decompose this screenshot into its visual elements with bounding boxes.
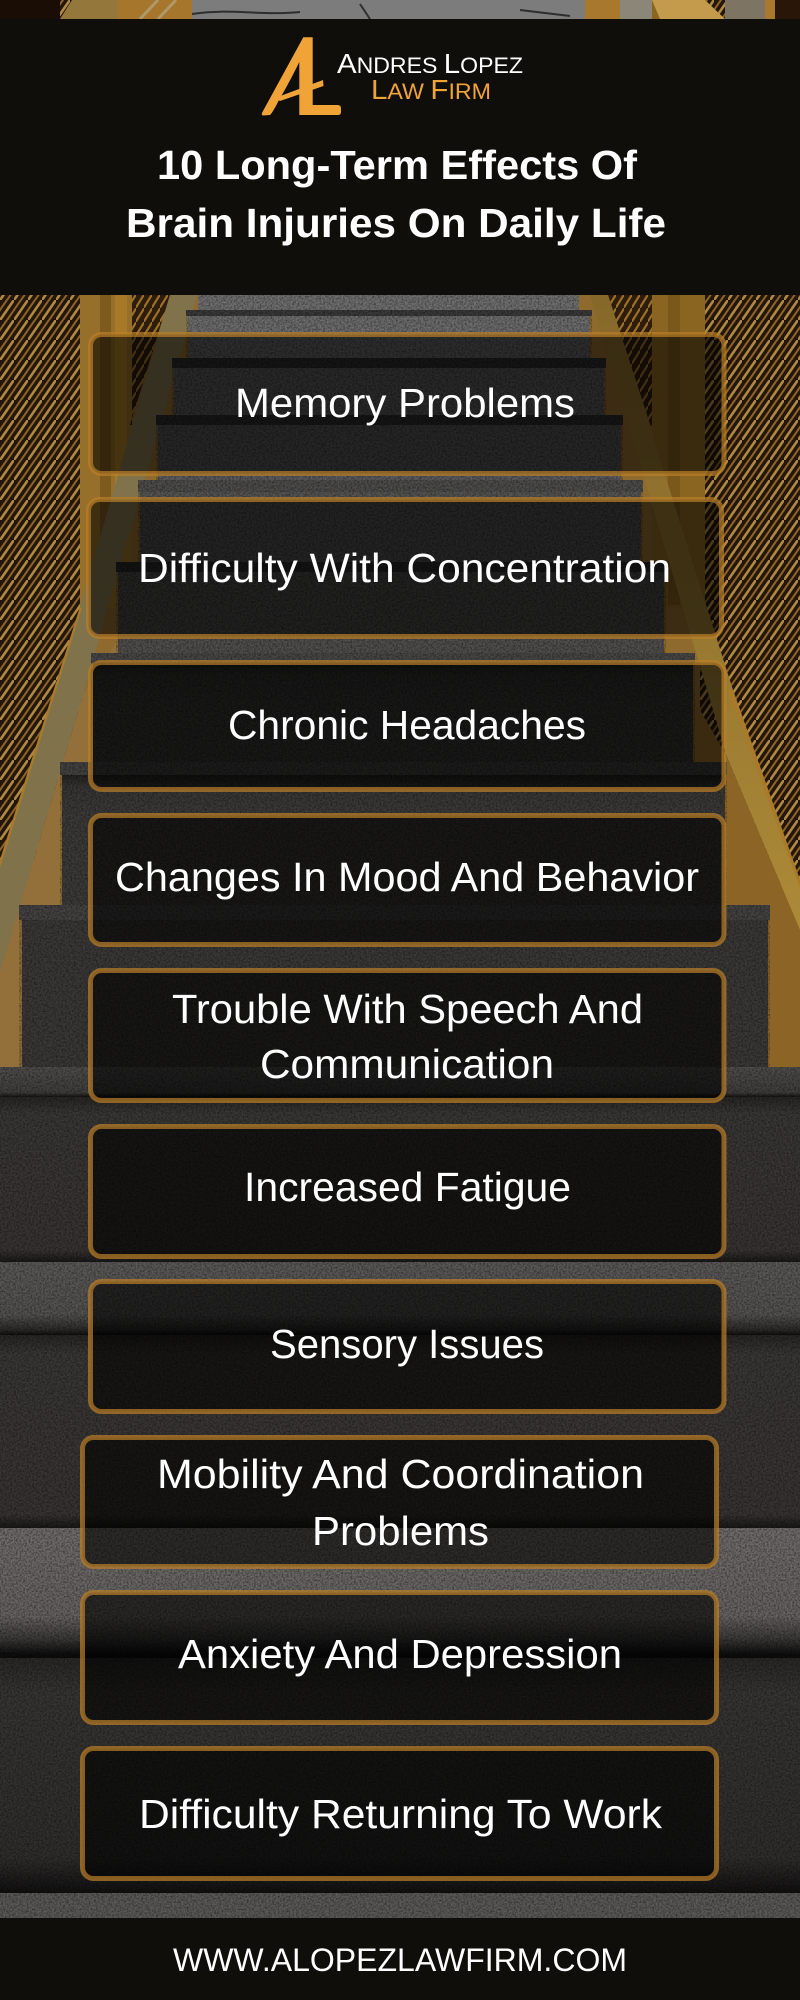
title <box>126 142 666 246</box>
logo mark: AL monogram <box>262 37 341 115</box>
footer website URL: WWW.ALOPEZLAWFIRM.COM <box>173 1942 627 1978</box>
panel: Trouble With Speech And Communication <box>90 970 724 1100</box>
right wire mesh <box>700 0 800 885</box>
panel: Increased Fatigue: Increased Fatigue <box>244 1164 571 1210</box>
logo text: Andres Lopez: ANDRES LOPEZ <box>337 48 523 79</box>
panel: Chronic Headaches <box>90 662 724 790</box>
left wire mesh <box>0 0 82 860</box>
wall beneath the rails <box>0 620 130 1070</box>
logo: Andres Lopez Law Firm <box>262 37 523 115</box>
panel: Difficulty With Concentration: Difficulty With Concentration <box>138 545 671 591</box>
panel: Difficulty Returning To Work <box>82 1748 716 1878</box>
panel: Sensory Issues <box>90 1282 724 1412</box>
panel: Increased Fatigue <box>90 1126 724 1256</box>
right yellow diagonal rail <box>590 295 800 930</box>
panel: Chronic Headaches: Chronic Headaches <box>228 702 586 748</box>
header panel <box>0 19 800 295</box>
right mesh edge cover <box>728 690 800 888</box>
logo text: Law Firm: LAW FIRM <box>371 74 491 105</box>
panel: Anxiety And Depression <box>82 1592 716 1722</box>
panel: Memory Problems: Memory Problems <box>235 380 575 426</box>
footer panel <box>0 1918 800 2000</box>
panel: Mobility And Coordination Problems: Problems <box>312 1508 489 1554</box>
title: 10 Long-Term Effects Of <box>157 142 637 188</box>
panel: Trouble With Speech And Communication: Communication <box>260 1041 554 1087</box>
top photo strip <box>0 0 800 19</box>
title: Brain Injuries On Daily Life <box>126 200 666 246</box>
panel: Sensory Issues: Sensory Issues <box>270 1321 544 1367</box>
panel: Trouble With Speech And Communication: Trouble With Speech And <box>172 986 643 1032</box>
panel: Difficulty Returning To Work: Difficulty Returning To Work <box>139 1791 663 1837</box>
panel: Memory Problems <box>90 334 724 474</box>
panel: Changes In Mood And Behavior: Changes In Mood And Behavior <box>115 854 699 900</box>
panel: Changes In Mood And Behavior <box>90 816 724 944</box>
left post and inner mesh <box>80 0 190 608</box>
left mesh edge cover <box>0 607 82 868</box>
panel: Anxiety And Depression: Anxiety And Depression <box>178 1631 622 1677</box>
panel: Mobility And Coordination Problems: Mobility And Coordination <box>157 1451 644 1497</box>
panel: Difficulty With Concentration <box>88 500 722 636</box>
left pale diagonal rail <box>0 295 197 973</box>
right post and inner mesh <box>590 0 705 608</box>
panel: Mobility And Coordination Problems <box>82 1438 716 1566</box>
